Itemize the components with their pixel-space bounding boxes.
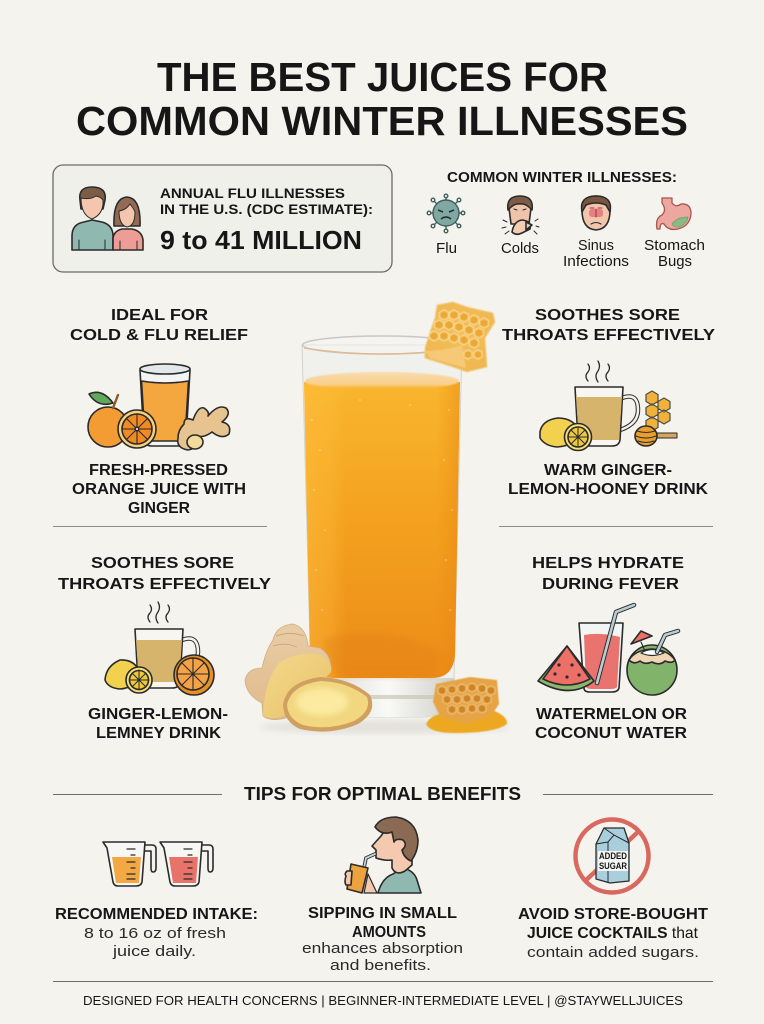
tip text: SIPPING IN SMALL (308, 905, 457, 922)
icon: no added sugar: SUGAR (599, 861, 627, 872)
glass body (302, 345, 462, 717)
condensation droplets (311, 399, 453, 611)
flu label: Flu (436, 240, 457, 257)
stat value: 9 to 41 MILLION (160, 225, 362, 255)
icon: colds (502, 196, 539, 234)
heading: IDEAL FOR (111, 307, 208, 324)
tip text: and benefits. (330, 957, 431, 974)
panel: common winter illnesses (427, 170, 705, 270)
tips heading: TIPS FOR OPTIMAL BENEFITS (244, 784, 521, 804)
juice name: GINGER (128, 500, 190, 517)
title: COMMON WINTER ILLNESSES (76, 98, 688, 144)
tip: avoid store-bought (518, 820, 708, 961)
icon: orange juice with ginger (88, 364, 230, 450)
icon: measuring cups (103, 842, 213, 886)
glass rim (302, 336, 462, 354)
tip text: contain added sugars. (527, 944, 699, 961)
section: sore throats, lemon drink (58, 555, 271, 742)
stat label: IN THE U.S. (CDC ESTIMATE): (160, 201, 373, 217)
heading (70, 307, 248, 344)
divider right (499, 526, 713, 527)
icon: ginger lemon mug (105, 602, 214, 695)
juice name: LEMNEY DRINK (96, 725, 221, 742)
colds label: Colds (501, 240, 539, 257)
icon: two people (72, 187, 143, 250)
heading (58, 555, 271, 593)
stomach label (644, 237, 705, 270)
juice name: GINGER-LEMON- (88, 706, 228, 723)
heading: HELPS HYDRATE (532, 555, 684, 572)
heading: COLD & FLU RELIEF (70, 327, 248, 344)
juice bottom shade (322, 632, 440, 677)
honeycomb garnish (425, 302, 495, 372)
sinus label: Sinus (578, 237, 614, 254)
juice foam surface (305, 372, 459, 390)
heading: SOOTHES SORE (91, 555, 234, 572)
heading: COMMON WINTER ILLNESSES: (447, 170, 677, 186)
icon: no added sugar (576, 820, 648, 892)
heading: DURING FEVER (542, 576, 679, 593)
heading (502, 307, 715, 344)
tip text: juice daily. (112, 943, 196, 960)
juice name: COCONUT WATER (535, 725, 687, 742)
section: cold and flu relief (70, 307, 248, 517)
tip: recommended intake (55, 842, 258, 960)
title: THE BEST JUICES FOR (157, 54, 608, 100)
stomach label: Stomach (644, 237, 705, 254)
tip text: JUICE COCKTAILS that (527, 925, 699, 942)
juice name (88, 706, 228, 742)
tip: sipping (302, 817, 463, 974)
footer: DESIGNED FOR HEALTH CONCERNS | BEGINNER-INTERMEDIATE LEVEL | @STAYWELLJUICES (83, 993, 683, 1008)
base shadow band (332, 695, 452, 699)
juice (304, 382, 460, 678)
juice name: FRESH-PRESSED (89, 462, 228, 479)
ginger slice (283, 677, 372, 732)
tip text: 8 to 16 oz of fresh (84, 925, 226, 942)
honeycomb piece with honey (426, 677, 507, 733)
icon: no added sugar: ADDED (599, 851, 627, 862)
sinus label (563, 237, 629, 270)
tip text (55, 906, 258, 960)
tip text: AMOUNTS (352, 924, 426, 941)
ginger root (245, 624, 331, 720)
shadow (260, 720, 510, 734)
juice name (508, 462, 708, 498)
stat label: ANNUAL FLU ILLNESSES (160, 185, 345, 201)
icon: watermelon and coconut (538, 605, 678, 695)
tip text: AVOID STORE-BOUGHT (518, 906, 708, 923)
tip text: RECOMMENDED INTAKE: (55, 906, 258, 923)
central juice glass illustration (245, 302, 510, 734)
heading: THROATS EFFECTIVELY (502, 327, 715, 344)
title (76, 54, 688, 144)
juice shading (304, 382, 460, 678)
juice name: WARM GINGER- (544, 462, 672, 479)
divider left (53, 526, 267, 527)
stomach label: Bugs (658, 253, 692, 270)
tip text: enhances absorption (302, 940, 463, 957)
icon: person sipping (345, 817, 421, 893)
rim juice reflection (304, 348, 460, 354)
tip text (302, 905, 463, 974)
stat label (160, 185, 373, 217)
juice name: ORANGE JUICE WITH (72, 481, 246, 498)
icon: stomach (657, 198, 691, 229)
juice name: LEMON-HOONEY DRINK (508, 481, 708, 498)
icon: flu virus (427, 194, 465, 233)
glass base (322, 678, 454, 717)
heading: THROATS EFFECTIVELY (58, 576, 271, 593)
heading: SOOTHES SORE (535, 307, 680, 324)
icon: ginger lemon honey mug (540, 361, 677, 450)
section: hydrate during fever (532, 555, 687, 742)
sinus label: Infections (563, 253, 629, 270)
section: sore throats, honey drink (502, 307, 715, 498)
panel: flu statistic (53, 165, 392, 272)
juice name (72, 462, 246, 517)
heading (532, 555, 684, 593)
juice name: WATERMELON OR (536, 706, 687, 723)
icon: sinus infection face (582, 196, 610, 230)
juice name (535, 706, 687, 742)
tip text (518, 906, 708, 961)
